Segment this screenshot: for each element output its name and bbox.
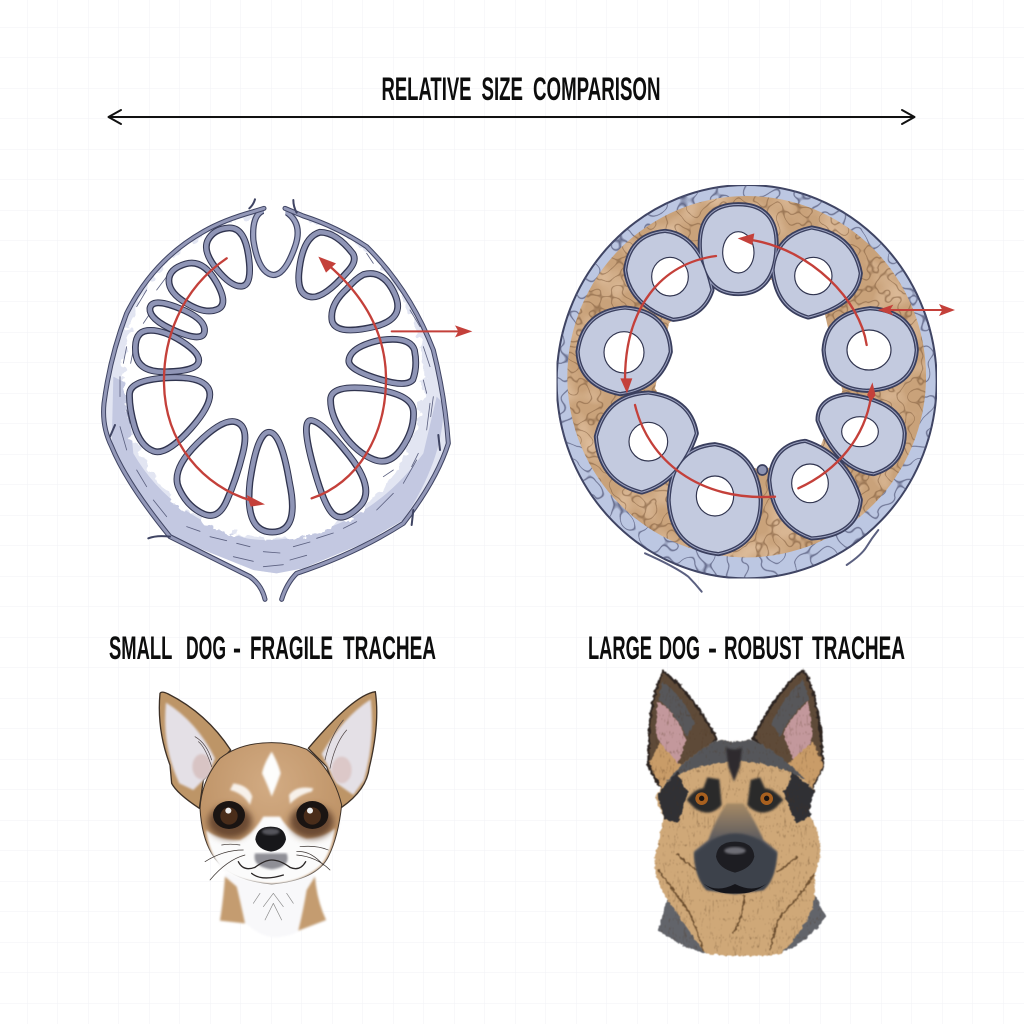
- eye surrounds and brows: [687, 777, 783, 813]
- nose bridge: [694, 803, 777, 894]
- red arrow: right arc: [312, 257, 386, 498]
- left ear: [648, 672, 717, 788]
- right ear inner: [783, 702, 813, 763]
- label: small dog: -: [233, 630, 241, 666]
- left ear: [159, 692, 231, 808]
- illustration: chihuahua head: [159, 692, 377, 937]
- arrow: relative size span: [108, 110, 914, 124]
- top notch fold: [253, 200, 298, 275]
- red arrow: left arc: [164, 258, 265, 507]
- cell rims: [129, 227, 416, 533]
- red arrow: arc one: [738, 233, 867, 345]
- small node between rings: [757, 465, 767, 475]
- right ear: [308, 692, 377, 807]
- tissue strokes: [120, 253, 433, 567]
- label: large dog: TRACHEA: [812, 630, 905, 666]
- nose highlight: [262, 828, 279, 835]
- neck tan sides: [220, 877, 326, 931]
- label: small dog: TRACHEA: [343, 630, 436, 666]
- mouth: [703, 883, 767, 894]
- trailing nerves: [645, 530, 878, 592]
- cell rim outlines: [129, 227, 416, 533]
- label: large dog: -: [708, 630, 717, 666]
- forehead gray band: [667, 739, 805, 782]
- left ear tan base: [649, 743, 682, 788]
- cell hollow: [132, 231, 412, 529]
- whiskers: [195, 720, 347, 920]
- brow marks: [230, 783, 313, 805]
- muzzle shadow: [255, 853, 288, 869]
- right ear tan base: [788, 742, 823, 788]
- furred coat: [648, 670, 826, 956]
- bottom tissue band: [112, 377, 443, 573]
- forehead blaze: [262, 752, 281, 797]
- head tan: [654, 739, 820, 956]
- white lumen: [655, 280, 842, 471]
- label: large dog: LARGE: [588, 630, 652, 666]
- right ear gray top: [772, 680, 809, 737]
- forehead centre stripe: [726, 747, 742, 782]
- outer blue wall: [557, 185, 937, 578]
- title: RELATIVE: [382, 71, 472, 107]
- eyes: [695, 792, 773, 805]
- left ear gray top: [658, 682, 695, 737]
- nose: [716, 842, 754, 873]
- nose highlight: [724, 847, 746, 854]
- left ear inner: [656, 702, 686, 763]
- left ear inner: [165, 703, 215, 790]
- neck: [219, 873, 327, 937]
- right dark cheek side: [783, 772, 815, 823]
- label: large dog: ROBUST: [724, 630, 803, 666]
- muzzle dark: [695, 833, 777, 893]
- head: [200, 743, 342, 884]
- label: small dog: SMALL: [109, 630, 172, 666]
- title: COMPARISON: [533, 71, 660, 107]
- red arrow: arc three: [635, 405, 775, 497]
- diagram: small dog fragile trachea: [101, 198, 472, 602]
- white muzzle and cheeks: [206, 817, 335, 884]
- left ear pink fold: [192, 754, 211, 779]
- eye patches: [208, 805, 334, 838]
- nose: [255, 827, 286, 852]
- cell inner outline: [132, 230, 414, 530]
- tan connective tissue ring: [567, 196, 926, 557]
- left dark cheek side: [657, 772, 688, 823]
- title: SIZE: [482, 71, 523, 107]
- white space around cells: [123, 217, 423, 540]
- right ear inner: [322, 699, 372, 795]
- diagram: large dog robust trachea: [557, 185, 955, 592]
- neck and chest dark: [658, 887, 826, 954]
- right ear: [753, 670, 823, 788]
- label: small dog: FRAGILE: [250, 630, 333, 666]
- red arrow: arc four: [798, 384, 875, 488]
- label: large dog: DOG: [659, 630, 700, 666]
- red double arrow: outward: [878, 304, 955, 316]
- cartilage rings: [580, 207, 914, 552]
- red arrow: outward: [392, 325, 472, 337]
- ring holes: [604, 232, 891, 516]
- eyes: [213, 801, 328, 829]
- mouth: [238, 860, 306, 878]
- right ear pink fold: [332, 757, 352, 783]
- illustration: german shepherd head: [648, 670, 826, 956]
- red arrow: arc two: [620, 256, 716, 393]
- top notch gap: [262, 200, 287, 223]
- label: small dog: DOG: [186, 630, 226, 666]
- ruff shadow stripes: [658, 853, 815, 950]
- outer wall: [104, 199, 448, 599]
- tissue wall: [104, 208, 448, 573]
